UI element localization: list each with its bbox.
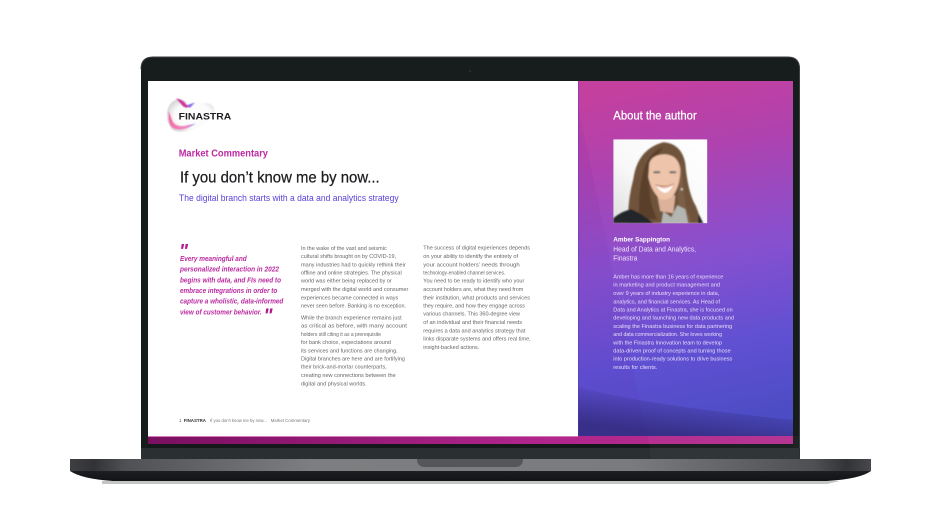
- heading: About the author: About the author: [613, 108, 697, 122]
- body column 1: merged with the digital world and consumer: [301, 287, 408, 293]
- page footer: [179, 418, 311, 424]
- author biography: over 9 years of industry experience in data,: [613, 291, 720, 297]
- body column 1: offline and online strategies. The physical: [301, 271, 402, 277]
- body column 2: your account holders’ needs through: [423, 262, 520, 268]
- author biography: [612, 275, 734, 371]
- body column 1: While the branch experience remains just: [301, 316, 402, 322]
- body column 1: holders still citing it as a prerequisite: [301, 332, 382, 338]
- author biography: scaling the Finastra business for data partnering: [613, 324, 732, 330]
- body column 1: In the wake of the vast and seismic: [301, 246, 387, 252]
- body column 2: [423, 246, 531, 351]
- author biography: into production-ready solutions to drive business: [613, 357, 732, 363]
- laptop base: [70, 459, 871, 484]
- pull quote: begins with data, and FIs need to: [180, 275, 281, 284]
- pull quote: embrace integrations in order to: [180, 286, 278, 295]
- subtitle: The digital branch starts with a data and analytics strategy: [179, 193, 399, 204]
- body column 1: as critical as before, with many account: [301, 324, 407, 330]
- body column 2: You need to be ready to identify who your: [423, 279, 524, 285]
- page footer: FINASTRA: [184, 418, 206, 424]
- author biography: Amber has more than 16 years of experience: [613, 275, 724, 281]
- logo wordmark: FINASTRA: [179, 110, 232, 121]
- body column 1: creating new connections between the: [301, 373, 396, 379]
- body column 1: many industries had to quickly rethink their: [301, 262, 406, 268]
- pull quote: capture a wholistic, data-informed: [180, 297, 284, 306]
- author biography: and data commercialization. She loves working: [613, 332, 722, 338]
- body column 1: [300, 246, 408, 387]
- body column 1: for bank choice, expectations around: [301, 340, 391, 346]
- body column 1: digital and physical worlds.: [301, 381, 367, 387]
- author biography: Data and Analytics at Finastra, she is focused on: [613, 307, 733, 313]
- author biography: analytics, and financial services. As Head of: [613, 299, 720, 305]
- logo swoosh: [167, 98, 214, 132]
- body column 2: links disparate systems and offers real time,: [423, 337, 531, 343]
- page footer: If you don’t know me by now...: [210, 418, 267, 424]
- title: If you don’t know me by now...: [180, 169, 380, 186]
- body column 2: insight-backed actions.: [423, 345, 480, 351]
- author photo: [613, 139, 708, 224]
- author biography: results for clients.: [613, 365, 658, 371]
- body column 1: cultural shifts brought on by COVID-19,: [301, 254, 396, 260]
- author name and role: [613, 237, 696, 263]
- pull quote: [179, 242, 284, 327]
- body column 2: various channels. This 360-degree view: [423, 312, 521, 318]
- laptop lid: [141, 57, 800, 459]
- body column 2: they require, and how they engage across: [423, 304, 525, 310]
- pull quote: personalized interaction in 2022: [179, 265, 280, 274]
- author name and role: Finastra: [613, 256, 637, 263]
- body column 2: technology-enabled channel services.: [423, 271, 506, 277]
- Finastra logo: [167, 98, 232, 132]
- body column 1: experiences became connected in ways: [301, 295, 398, 301]
- closing quote mark: ": [264, 306, 274, 327]
- pull quote: Every meaningful and: [180, 254, 247, 263]
- panel: about the author background: [578, 81, 793, 436]
- magenta footer strip: [148, 436, 793, 444]
- body column 2: The success of digital experiences depends: [423, 246, 530, 252]
- body column 1: its services and functions are changing.: [301, 348, 398, 354]
- body column 2: requires a data and analytics strategy that: [423, 328, 526, 334]
- body column 1: never seen before. Banking is no exception.: [301, 304, 406, 310]
- author name and role: Head of Data and Analytics,: [613, 246, 696, 253]
- page footer: Market Commentary: [271, 418, 311, 424]
- author biography: data-driven proof of concepts and turning those: [613, 349, 731, 355]
- body column 2: account holders are, what they need from: [423, 287, 523, 293]
- pull quote: view of customer behavior.: [180, 307, 262, 316]
- body column 2: their institution, what products and services: [423, 295, 530, 301]
- body column 1: world was either being replaced by or: [300, 279, 392, 285]
- screen page: left white panel: [148, 81, 578, 436]
- page footer: 1: [179, 418, 182, 423]
- author biography: in marketing and product management and: [613, 283, 720, 289]
- bezel glare: [648, 436, 799, 459]
- body column 2: of an individual and their financial needs: [423, 320, 522, 326]
- author name and role: Amber Sappington: [613, 237, 670, 244]
- opening quote mark: ": [179, 242, 189, 262]
- author biography: developing and launching new data products and: [613, 316, 734, 322]
- author biography: with the Finastra Innovation team to develop: [612, 340, 723, 346]
- eyebrow: Market Commentary: Market Commentary: [179, 148, 268, 159]
- body column 1: Digital branches are here and are fortifying: [301, 356, 405, 362]
- body column 2: on your ability to identify the entirety of: [423, 254, 518, 260]
- body column 1: their brick-and-mortar counterparts,: [301, 365, 387, 371]
